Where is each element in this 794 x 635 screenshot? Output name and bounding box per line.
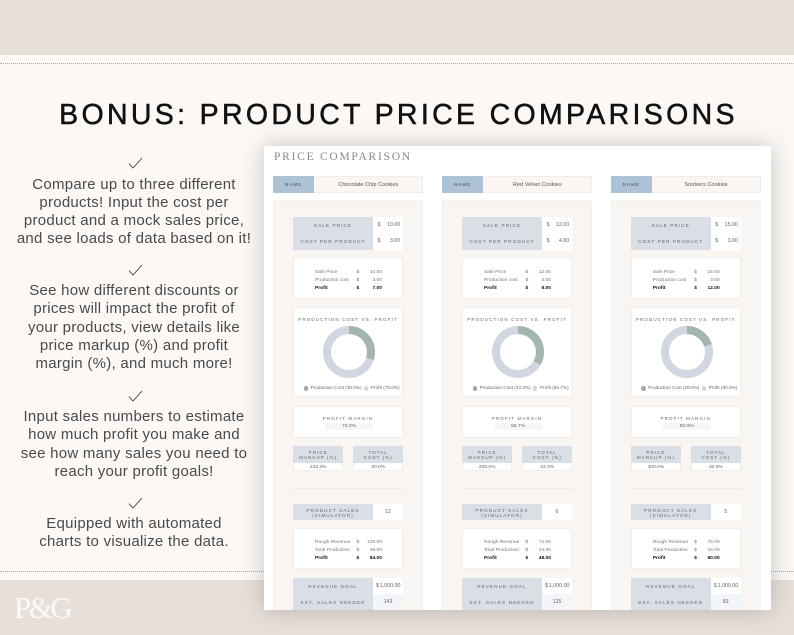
sales profit summary: Total Production bbox=[315, 548, 350, 553]
price markup table: 233.3% bbox=[310, 465, 326, 470]
product name row bbox=[273, 176, 423, 193]
panel: product column 2 bbox=[442, 176, 592, 610]
donut chart bbox=[492, 326, 544, 378]
product sales simulator: (SIMULATOR) bbox=[481, 513, 523, 518]
donut chart bbox=[661, 326, 713, 378]
revenue goal table: REVENUE GOAL bbox=[646, 584, 695, 589]
unit profit summary: $ bbox=[356, 286, 359, 291]
sales profit summary bbox=[631, 528, 741, 569]
product sales simulator bbox=[631, 504, 741, 520]
product name row: NAME bbox=[454, 182, 471, 187]
sales profit summary: 120.00 bbox=[367, 540, 382, 545]
unit profit summary: $ bbox=[694, 286, 697, 291]
text block: discounts and prices: your products, view details like bbox=[28, 318, 240, 336]
unit profit summary: $ bbox=[525, 286, 528, 291]
unit profit summary: 4.00 bbox=[541, 278, 551, 283]
icon: check mark 2 bbox=[128, 264, 142, 276]
profit margin card: 66.7% bbox=[511, 424, 525, 429]
text block: sales numbers bbox=[21, 408, 247, 480]
inputs table bbox=[631, 217, 741, 250]
unit profit summary: 8.00 bbox=[541, 286, 551, 291]
inputs table: $ bbox=[715, 222, 718, 228]
revenue goal table: EST. SALES NEEDED bbox=[638, 600, 703, 605]
text block: automated charts: charts to visualize the data. bbox=[39, 533, 229, 550]
inputs table: COST PER PRODUCT bbox=[469, 239, 535, 244]
sales profit summary: $ bbox=[356, 548, 359, 553]
sales profit summary: Profit bbox=[484, 556, 497, 561]
text block: discounts and prices: prices will impact the profit of bbox=[33, 300, 235, 317]
revenue goal table: EST. SALES NEEDED bbox=[469, 600, 534, 605]
text block: sales numbers: Input sales numbers to estimate bbox=[24, 408, 244, 425]
unit profit summary: 3.00 bbox=[372, 278, 382, 283]
profit margin card: 70.0% bbox=[342, 424, 356, 429]
product sales simulator: (SIMULATOR) bbox=[650, 513, 691, 518]
inputs table: $ bbox=[377, 222, 380, 228]
total cost table: TOTAL bbox=[368, 450, 388, 455]
revenue goal table: $ bbox=[545, 583, 548, 589]
price markup table: MARKUP (%) bbox=[468, 455, 506, 460]
logo: P&G bbox=[14, 590, 70, 625]
inputs table: $ bbox=[546, 222, 549, 228]
unit profit summary: Profit bbox=[484, 286, 497, 291]
sales profit summary: $ bbox=[356, 540, 359, 545]
panel: product column 3 bbox=[611, 176, 761, 610]
donut chart bbox=[323, 326, 375, 378]
product sales simulator: PRODUCT SALES bbox=[644, 508, 697, 513]
total cost table: 20.0% bbox=[709, 465, 723, 470]
text block: sales numbers: how much profit you make and bbox=[28, 426, 240, 443]
revenue goal table: EST. SALES NEEDED bbox=[300, 600, 365, 605]
revenue goal table: 1,000.00 bbox=[718, 583, 738, 589]
text block: discounts and prices: margin (%), and much more! bbox=[35, 355, 233, 372]
sales profit summary: 15.00 bbox=[707, 548, 720, 553]
product name row: Snickers Cookies bbox=[684, 182, 728, 188]
profit margin card: PROFIT MARGIN bbox=[492, 416, 542, 421]
legend: Profit (80.0%) bbox=[709, 385, 737, 390]
price markup table: PRICE bbox=[646, 450, 665, 455]
revenue goal table: 1,000.00 bbox=[549, 583, 569, 589]
panel: product column 1 bbox=[273, 176, 423, 610]
sales profit summary: $ bbox=[525, 556, 528, 561]
text block: automated charts: Equipped with automated bbox=[46, 515, 222, 532]
inputs table: 12.00 bbox=[556, 222, 569, 228]
unit profit summary bbox=[462, 257, 572, 299]
inputs table: SALE PRICE bbox=[314, 223, 352, 228]
sales profit summary bbox=[462, 528, 572, 569]
sales profit summary: Rough Revenue bbox=[653, 540, 688, 545]
price markup table: MARKUP (%) bbox=[299, 455, 337, 460]
product sales simulator: PRODUCT SALES bbox=[306, 508, 360, 513]
unit profit summary: Profit bbox=[653, 286, 665, 291]
text block: discounts and prices bbox=[28, 282, 240, 372]
sales profit summary: $ bbox=[694, 540, 697, 545]
unit profit summary: 3.00 bbox=[710, 278, 720, 283]
profit margin card: PROFIT MARGIN bbox=[323, 416, 373, 421]
donut chart card bbox=[462, 307, 572, 397]
bottom band bbox=[0, 580, 794, 635]
unit profit summary: $ bbox=[356, 278, 359, 283]
text block: compare products: products! Input the cost per bbox=[39, 194, 229, 211]
total cost table bbox=[522, 446, 572, 471]
unit profit summary bbox=[631, 257, 741, 299]
sales profit summary: Profit bbox=[653, 556, 665, 561]
product sales simulator: PRODUCT SALES bbox=[475, 508, 529, 513]
sales profit summary: Rough Revenue bbox=[315, 540, 350, 545]
unit profit summary: $ bbox=[694, 270, 697, 275]
price markup table: 200.0% bbox=[479, 465, 495, 470]
total cost table: COST (%) bbox=[701, 455, 730, 460]
revenue goal table: 83 bbox=[723, 599, 729, 605]
price markup table: PRICE bbox=[478, 450, 497, 455]
unit profit summary: Profit bbox=[315, 286, 328, 291]
inputs table bbox=[462, 217, 572, 250]
unit profit summary: 7.00 bbox=[372, 286, 382, 291]
total cost table: COST (%) bbox=[533, 455, 562, 460]
icon: check mark 4 bbox=[128, 498, 142, 508]
sales profit summary: Total Production bbox=[653, 548, 688, 553]
text block: compare products: and see loads of data based on it! bbox=[17, 230, 251, 247]
sales profit summary: 84.00 bbox=[370, 556, 382, 561]
revenue goal table: $ bbox=[714, 583, 717, 589]
revenue goal table: 1,000.00 bbox=[380, 583, 400, 589]
product sales simulator bbox=[293, 504, 403, 520]
donut chart card: PRODUCTION COST VS. PROFIT bbox=[467, 317, 567, 322]
sales profit summary: 36.00 bbox=[370, 548, 382, 553]
revenue goal table: REVENUE GOAL bbox=[308, 584, 358, 589]
title: BONUS: PRODUCT PRICE COMPARISONS bbox=[59, 99, 738, 131]
sales profit summary: Rough Revenue bbox=[484, 540, 519, 545]
unit profit summary: 15.00 bbox=[707, 270, 720, 275]
donut chart card bbox=[293, 307, 403, 397]
text block: automated charts bbox=[39, 515, 229, 550]
legend: Production Cost (30.0%) bbox=[311, 385, 362, 390]
total cost table bbox=[691, 446, 741, 471]
total cost table: COST (%) bbox=[364, 455, 393, 460]
legend: Profit (66.7%) bbox=[540, 385, 569, 390]
total cost table bbox=[353, 446, 403, 471]
inputs table: 3.00 bbox=[728, 238, 738, 244]
inputs table: SALE PRICE bbox=[483, 223, 521, 228]
sales profit summary: 60.00 bbox=[707, 556, 720, 561]
legend bbox=[304, 385, 400, 391]
profit margin card: 80.0% bbox=[680, 424, 694, 429]
product name row: NAME bbox=[285, 182, 302, 187]
total cost table: 33.3% bbox=[540, 465, 554, 470]
text block: compare products: product and a mock sales price, bbox=[24, 212, 244, 229]
donut chart card bbox=[631, 307, 741, 397]
sales profit summary: $ bbox=[356, 556, 359, 561]
unit profit summary: Production cost bbox=[484, 278, 518, 283]
profit margin card bbox=[631, 406, 741, 438]
text block: sales numbers: reach your profit goals! bbox=[54, 463, 214, 480]
unit profit summary: $ bbox=[525, 278, 528, 283]
top band bbox=[0, 0, 794, 55]
unit profit summary: 12.00 bbox=[707, 286, 720, 291]
sales profit summary: $ bbox=[525, 548, 528, 553]
revenue goal table: REVENUE GOAL bbox=[477, 584, 527, 589]
sales profit summary: $ bbox=[694, 548, 697, 553]
product name row: Red Velvet Cookies bbox=[513, 182, 562, 188]
text block: discounts and prices: price markup (%) and profit bbox=[40, 337, 228, 354]
unit profit summary: Production cost bbox=[653, 278, 686, 283]
sales profit summary: 72.00 bbox=[539, 540, 551, 545]
sales profit summary: $ bbox=[694, 556, 697, 561]
sales profit summary: $ bbox=[525, 540, 528, 545]
profit margin card bbox=[293, 406, 403, 438]
price markup table bbox=[293, 446, 343, 471]
revenue goal table bbox=[293, 578, 403, 611]
product sales simulator: 6 bbox=[556, 509, 558, 515]
revenue goal table: $ bbox=[376, 583, 379, 589]
inputs table: 15.00 bbox=[725, 222, 738, 228]
total cost table: 30.0% bbox=[371, 465, 385, 470]
legend bbox=[641, 385, 737, 391]
sales profit summary: Total Production bbox=[484, 548, 519, 553]
revenue goal table bbox=[462, 578, 572, 611]
legend bbox=[473, 385, 569, 391]
unit profit summary: Sale Price bbox=[653, 270, 675, 275]
unit profit summary: 12.00 bbox=[539, 270, 551, 275]
inputs table: 3.00 bbox=[390, 238, 400, 244]
inputs table: 10.00 bbox=[387, 222, 400, 228]
unit profit summary: $ bbox=[356, 270, 359, 275]
text block: compare products: Compare up to three different bbox=[32, 176, 236, 192]
price markup table: MARKUP (%) bbox=[637, 455, 675, 460]
unit profit summary: Sale Price bbox=[315, 270, 337, 275]
legend: Production Cost (33.3%) bbox=[480, 385, 531, 390]
price markup table: 400.0% bbox=[648, 465, 664, 470]
icon: check mark 1 bbox=[128, 158, 142, 168]
legend: Profit (70.0%) bbox=[371, 385, 400, 390]
unit profit summary: Production cost bbox=[315, 278, 349, 283]
product name row bbox=[442, 176, 592, 193]
product sales simulator: 5 bbox=[724, 509, 727, 515]
spreadsheet heading: PRICE COMPARISON bbox=[274, 151, 412, 163]
price markup table: PRICE bbox=[309, 450, 328, 455]
unit profit summary: Sale Price bbox=[484, 270, 506, 275]
inputs table: $ bbox=[715, 238, 718, 244]
revenue goal table: 125 bbox=[553, 599, 561, 605]
sales profit summary: Profit bbox=[315, 556, 328, 561]
inputs table: COST PER PRODUCT bbox=[300, 239, 366, 244]
product name row bbox=[611, 176, 760, 193]
total cost table: TOTAL bbox=[537, 450, 557, 455]
inputs table: $ bbox=[377, 238, 380, 244]
total cost table: TOTAL bbox=[706, 450, 726, 455]
inputs table: $ bbox=[546, 238, 549, 244]
product name row: NAME bbox=[623, 182, 640, 187]
product sales simulator: 12 bbox=[385, 509, 391, 515]
text block: sales numbers: see how many sales you need to bbox=[21, 444, 247, 462]
unit profit summary: 10.00 bbox=[370, 270, 382, 275]
product name row: Chocolate Chip Cookies bbox=[338, 182, 398, 188]
product sales simulator bbox=[462, 504, 572, 520]
inputs table: 4.00 bbox=[559, 238, 569, 244]
revenue goal table bbox=[631, 578, 741, 611]
price markup table bbox=[631, 446, 681, 471]
legend: Production Cost (20.0%) bbox=[648, 385, 699, 390]
product sales simulator: (SIMULATOR) bbox=[312, 513, 354, 518]
profit margin card bbox=[462, 406, 572, 438]
profit margin card: PROFIT MARGIN bbox=[660, 416, 711, 421]
text block: compare products bbox=[17, 176, 251, 247]
unit profit summary: $ bbox=[694, 278, 697, 283]
sales profit summary: 48.00 bbox=[539, 556, 551, 561]
unit profit summary: $ bbox=[525, 270, 528, 275]
panel: spreadsheet bbox=[264, 146, 771, 610]
inputs table: SALE PRICE bbox=[652, 223, 690, 228]
icon: check mark 3 bbox=[128, 390, 142, 402]
sales profit summary: 75.00 bbox=[707, 540, 720, 545]
price markup table bbox=[462, 446, 512, 471]
donut chart card: PRODUCTION COST VS. PROFIT bbox=[298, 317, 398, 322]
unit profit summary bbox=[293, 257, 403, 299]
sales profit summary bbox=[293, 528, 403, 569]
inputs table bbox=[293, 217, 403, 250]
donut chart card: PRODUCTION COST VS. PROFIT bbox=[636, 317, 735, 322]
inputs table: COST PER PRODUCT bbox=[638, 239, 703, 244]
revenue goal table: 143 bbox=[384, 599, 392, 605]
text block: discounts and prices: See how different discounts or bbox=[29, 282, 239, 299]
sales profit summary: 24.00 bbox=[539, 548, 551, 553]
